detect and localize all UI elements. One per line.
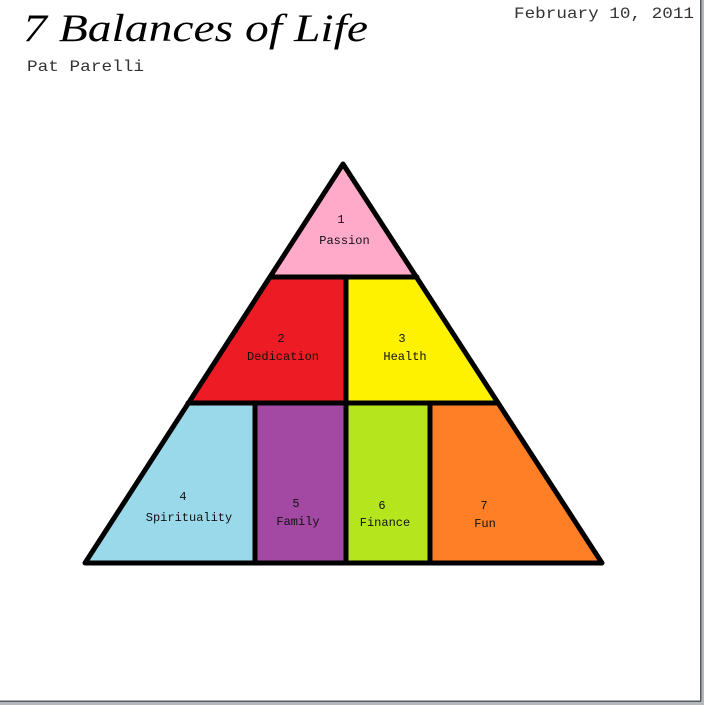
segment 5: Family: 5: [292, 497, 300, 511]
segment 2: Dedication: Dedication: [247, 350, 319, 364]
segment 7: Fun: 7: [480, 499, 488, 513]
segment 6: Finance: [346, 403, 430, 563]
segment 4: Spirituality: [85, 403, 255, 563]
segment 7: Fun: Fun: [474, 517, 496, 531]
segment 4: Spirituality: Spirituality: [146, 511, 232, 525]
date: February 10, 2011: [514, 5, 694, 23]
segment 3: Health: [346, 277, 498, 403]
segment 1: Passion: 1: [337, 213, 345, 227]
segment 4: Spirituality: 4: [179, 490, 187, 504]
segment 1: Passion: Passion: [319, 234, 370, 248]
segment 2: Dedication: 2: [277, 332, 285, 346]
title: 7 Balances of Life: [23, 7, 368, 50]
segment 6: Finance: 6: [378, 499, 386, 513]
segment 5: Family: Family: [276, 515, 320, 529]
pyramid diagram: [85, 164, 602, 563]
segment 5: Family: [255, 403, 346, 563]
segment 3: Health: Health: [383, 350, 427, 364]
segment 2: Dedication: [188, 277, 346, 403]
segment 7: Fun: [430, 403, 602, 563]
segment 3: Health: 3: [398, 332, 406, 346]
author: Pat Parelli: [27, 58, 144, 76]
segment 6: Finance: Finance: [360, 516, 410, 530]
pyramid outlines: [85, 164, 602, 563]
segment 1: Passion: [270, 164, 417, 277]
